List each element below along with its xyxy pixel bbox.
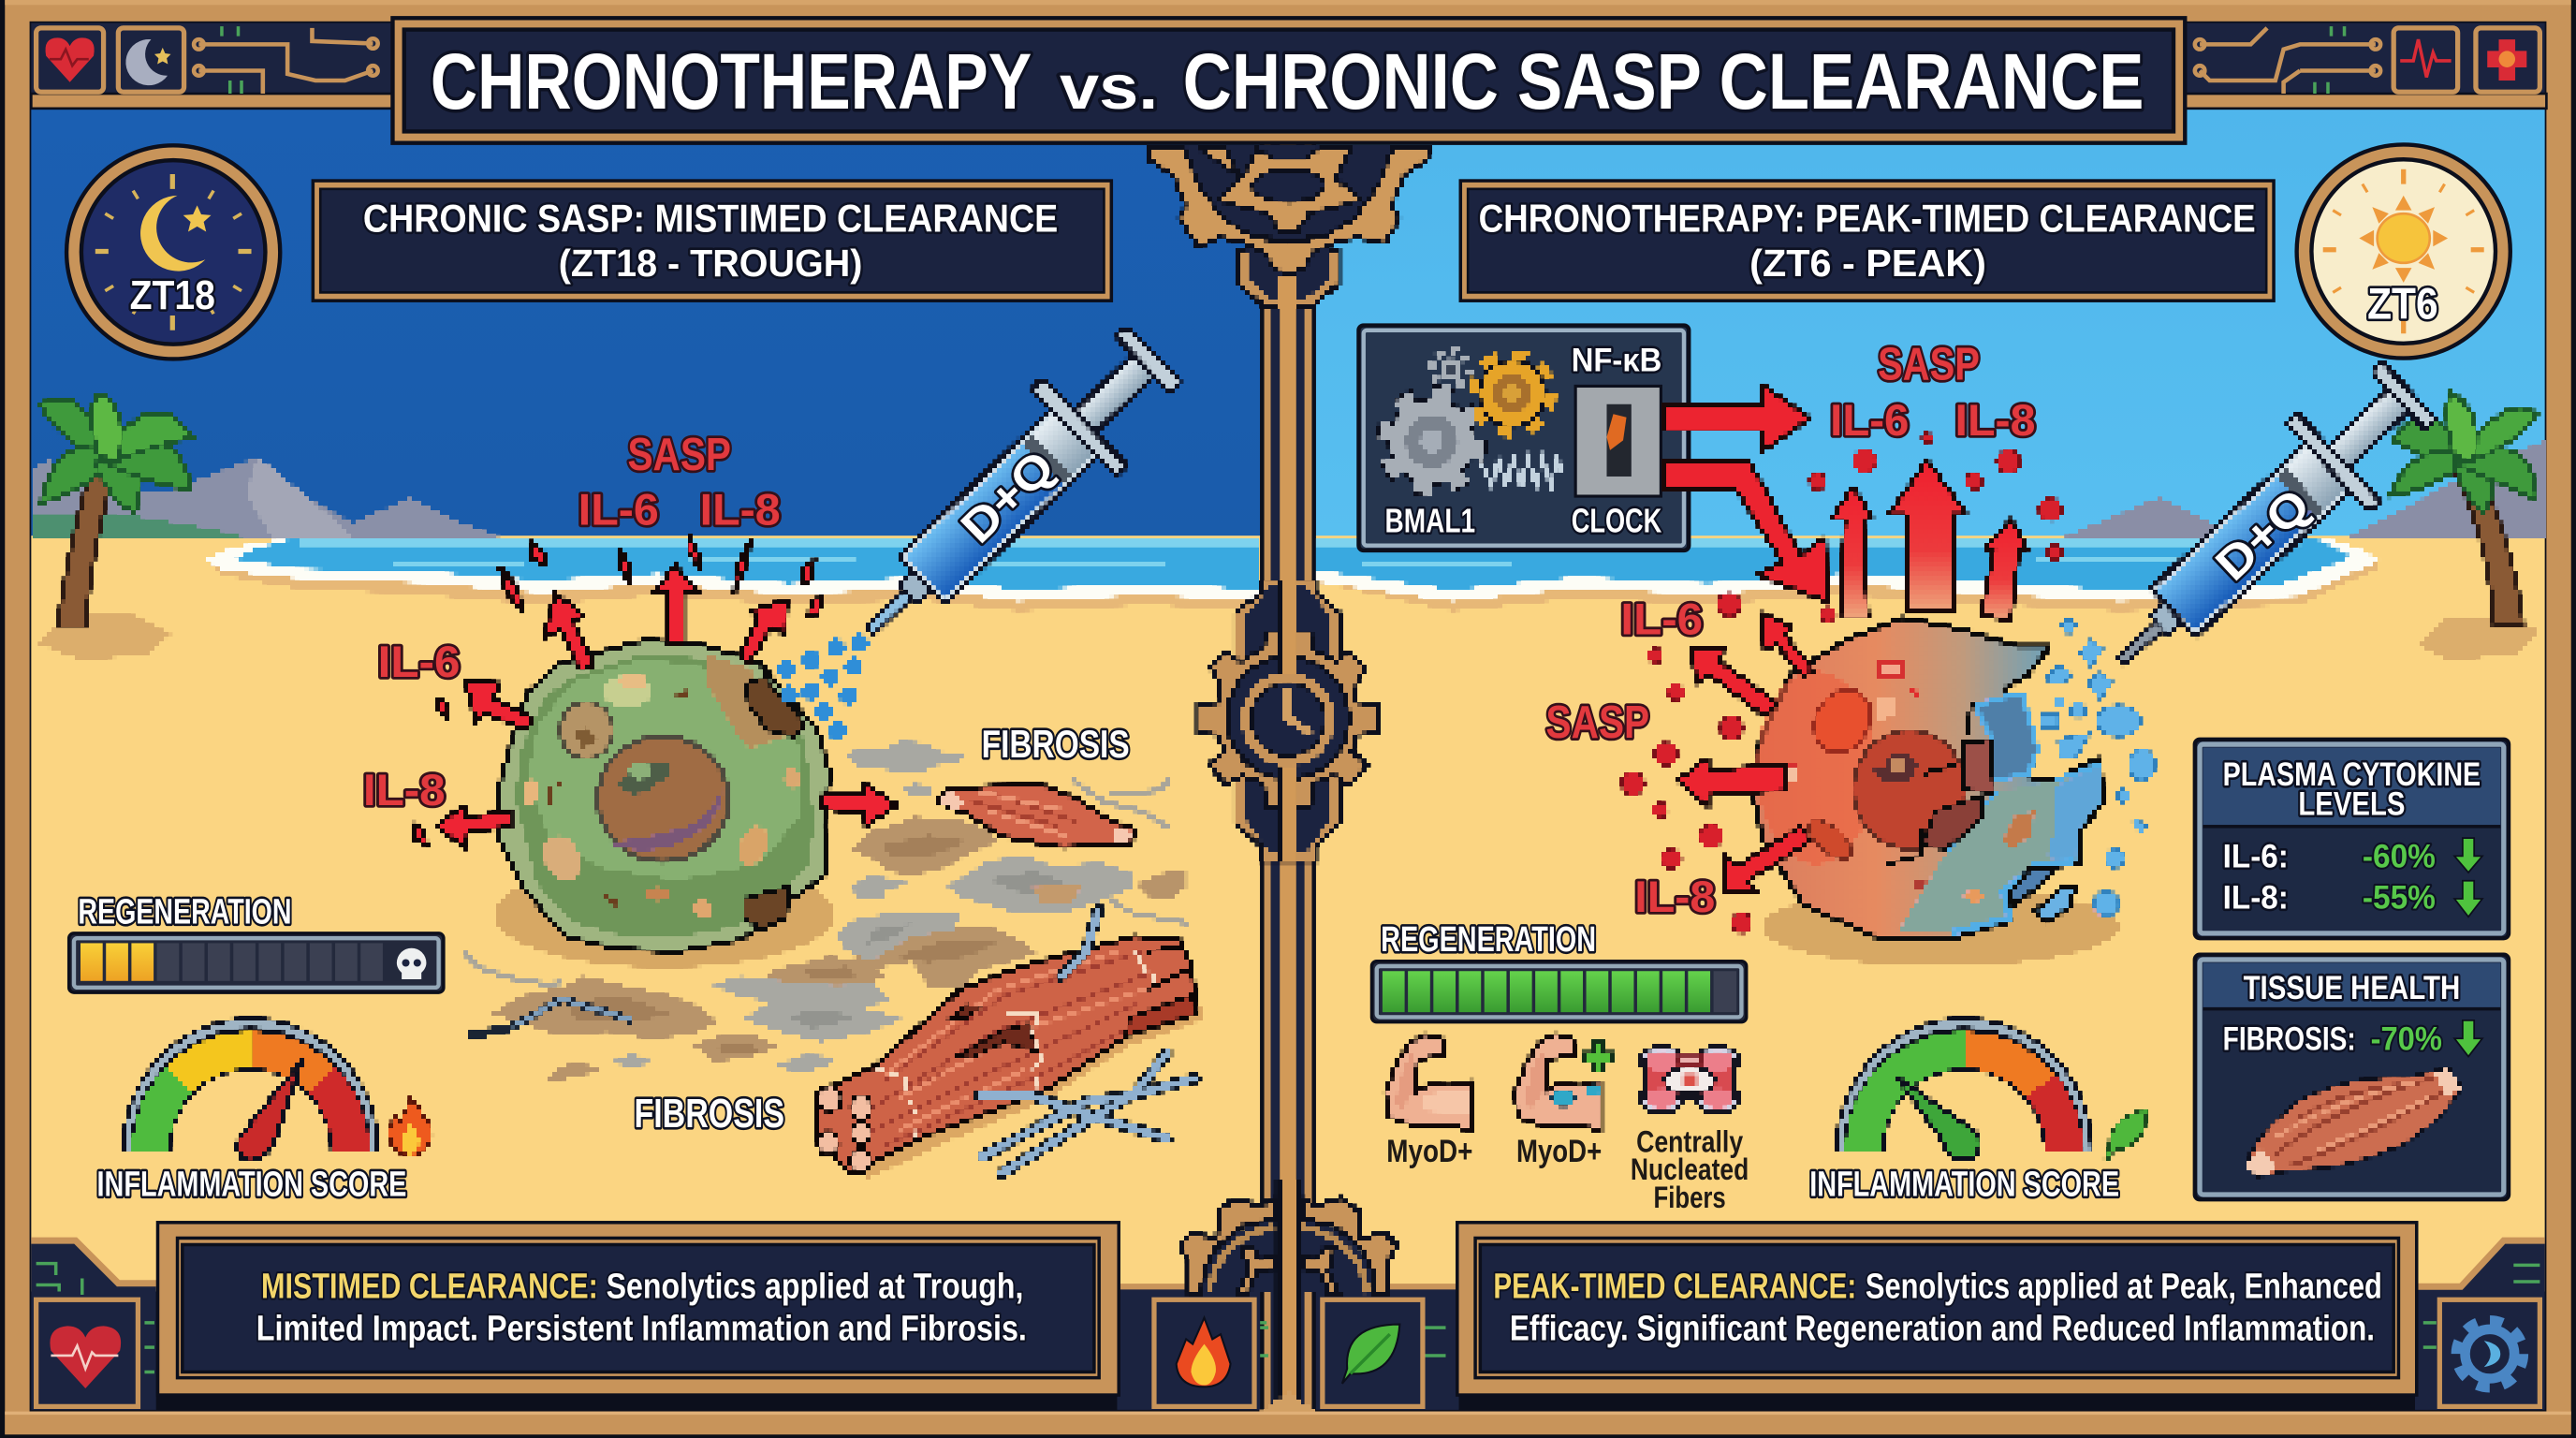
panel: peak-timed clearance summary: PEAK-TIMED CLEARANCE: (1493, 1267, 1856, 1306)
panel: tissue health: -70% (2371, 1021, 2442, 1058)
title: vs. (1060, 53, 1158, 123)
right inflammation gauge (1809, 1023, 2147, 1204)
disintegrating cell with SASP burst: IL-8 (1955, 396, 2036, 446)
panel: peak-timed clearance summary: Senolytics applied at Peak, Enhanced (1866, 1267, 2382, 1306)
panel: left scene background (31, 107, 1260, 1292)
icon: heart badge (37, 28, 104, 92)
icon: moon badge (118, 28, 184, 92)
panel: plasma cytokine levels (2195, 740, 2509, 938)
panel: BMAL1 CLOCK NF-kB switch: BMAL1 (1385, 502, 1475, 540)
heading: chronic SASP panel: (ZT18 - TROUGH) (559, 242, 862, 285)
icon: gear box (2439, 1299, 2539, 1406)
senescent cell with SASP arrows: IL-8 (700, 486, 781, 536)
icon: left palm tree (39, 392, 192, 661)
icon: red cross badge (2476, 28, 2539, 92)
panel: mistimed clearance summary: Senolytics applied at Trough, (607, 1267, 1023, 1306)
left inflammation gauge (97, 1023, 432, 1204)
bottom strip: center (1117, 1286, 1459, 1410)
left regeneration bar: REGENERATION (78, 891, 292, 931)
icon: MyoD+ muscle arm: MyoD+ (1386, 1134, 1472, 1169)
panel: mistimed clearance summary (157, 1223, 1119, 1395)
heading: chronotherapy panel: (ZT6 - PEAK) (1749, 242, 1986, 285)
icon: down arrow IL-6 (2454, 838, 2482, 873)
right regeneration bar (1372, 919, 1747, 1022)
icon: MyoD+ muscle arm (1385, 1034, 1472, 1169)
icon: ZT6 day clock (2297, 144, 2510, 359)
senescent cell with SASP arrows (363, 430, 897, 967)
icon: ZT6 day clock: ZT6 (2367, 279, 2438, 329)
bottom strip: left (31, 1240, 1266, 1410)
panel: tissue health (2195, 955, 2509, 1199)
icon: leaf box (1323, 1299, 1423, 1406)
icon: top gear ornament (1149, 145, 1429, 309)
senescent cell with SASP arrows: IL-8 (363, 766, 446, 815)
icon: ZT18 night clock: ZT18 (130, 272, 215, 318)
top strip: circuits and status icons, right (2180, 23, 2546, 109)
icon: torn muscle bundle (817, 910, 1201, 1180)
syringe: left D+Q: D+Q (952, 441, 1064, 553)
label: fibrosis lower: FIBROSIS (634, 1091, 784, 1137)
panel: plasma cytokine levels: -55% (2363, 880, 2436, 917)
disintegrating cell with SASP burst (1546, 339, 2155, 966)
left beach scenery: hills and water (31, 457, 1260, 611)
icon: heart pulse box (37, 1299, 138, 1406)
icon: down arrow IL-8 (2454, 881, 2482, 917)
left inflammation gauge: INFLAMMATION SCORE (97, 1165, 406, 1204)
heading: chronotherapy panel (1460, 181, 2274, 301)
panel: BMAL1 CLOCK NF-kB switch: CLOCK (1572, 502, 1661, 540)
icon: fire box (1154, 1299, 1254, 1406)
heading: chronic SASP panel (313, 181, 1111, 301)
disintegrating cell with SASP burst: IL-6 (1830, 396, 1909, 446)
senescent cell with SASP arrows: IL-6 (378, 638, 460, 687)
panel: tissue health: FIBROSIS: (2223, 1021, 2356, 1058)
panel: mistimed clearance summary: Limited Impact. Persistent Inflammation and Fibrosis. (256, 1308, 1027, 1347)
disintegrating cell with SASP burst: IL-6 (1620, 594, 1703, 644)
panel: plasma cytokine levels: -60% (2363, 839, 2436, 875)
syringe: right D+Q (2079, 346, 2451, 707)
title: CHRONIC SASP CLEARANCE (1183, 37, 2144, 125)
icon: centrally nucleated fibers (1631, 1047, 1749, 1214)
icon: MyoD+ muscle arm with satellite cells (1515, 1034, 1612, 1169)
senescent cell with SASP arrows: IL-6 (578, 486, 659, 536)
icon: centrally nucleated fibers: Centrally (1636, 1124, 1743, 1158)
disintegrating cell with SASP burst: SASP (1546, 697, 1649, 748)
panel: right scene background (1316, 107, 2545, 1292)
bottom frame band (5, 1412, 2571, 1434)
icon: center clock gear (1198, 580, 1378, 861)
icon: small muscle (936, 785, 1137, 847)
title: CHRONOTHERAPY (431, 37, 1032, 125)
left regeneration bar (69, 891, 444, 992)
icon: pulse badge (2393, 28, 2458, 92)
right inflammation gauge: INFLAMMATION SCORE (1809, 1165, 2119, 1204)
title (392, 18, 2185, 143)
panel: plasma cytokine levels: LEVELS (2298, 786, 2405, 823)
panel: plasma cytokine levels: IL-8: (2223, 880, 2289, 917)
icon: centrally nucleated fibers: Nucleated (1631, 1152, 1749, 1186)
panel: tissue health: TISSUE HEALTH (2244, 970, 2460, 1006)
right beach scenery: hills and water (1316, 440, 2545, 611)
label: fibrosis upper: FIBROSIS (982, 722, 1130, 766)
top strip: circuits and status icons, left (31, 23, 396, 109)
icon: fibrosis patches (463, 741, 1190, 1083)
disintegrating cell with SASP burst: IL-8 (1634, 873, 1715, 922)
disintegrating cell with SASP burst: SASP (1878, 339, 1980, 389)
heading: chronotherapy panel: CHRONOTHERAPY: PEAK-TIMED CLEARANCE (1479, 197, 2256, 240)
panel: BMAL1 CLOCK NF-kB switch (1358, 326, 1689, 550)
senescent cell with SASP arrows: SASP (627, 430, 731, 480)
syringe: left D+Q (828, 311, 1196, 674)
syringe: right D+Q: D+Q (2206, 479, 2320, 591)
panel: mistimed clearance summary: MISTIMED CLEARANCE: (261, 1267, 598, 1306)
right regeneration bar: REGENERATION (1381, 919, 1596, 959)
center divider column (1260, 139, 1316, 1413)
bottom strip: right (2415, 1240, 2545, 1410)
panel: BMAL1 CLOCK NF-kB switch: NF-κB (1572, 343, 1661, 379)
panel: peak-timed clearance summary (1457, 1223, 2417, 1395)
icon: centrally nucleated fibers: Fibers (1654, 1181, 1726, 1214)
panel: plasma cytokine levels: IL-6: (2223, 839, 2289, 875)
icon: MyoD+ muscle arm with satellite cells: MyoD+ (1516, 1134, 1602, 1169)
icon: bottom center gears (1179, 1180, 1398, 1412)
panel: peak-timed clearance summary: Efficacy. Significant Regeneration and Reduced Inflammation. (1510, 1308, 2375, 1347)
panel: plasma cytokine levels: PLASMA CYTOKINE (2223, 756, 2481, 793)
heading: chronic SASP panel: CHRONIC SASP: MISTIMED CLEARANCE (363, 197, 1058, 240)
icon: ZT18 night clock (66, 145, 280, 359)
icon: right palm tree (2389, 392, 2539, 661)
